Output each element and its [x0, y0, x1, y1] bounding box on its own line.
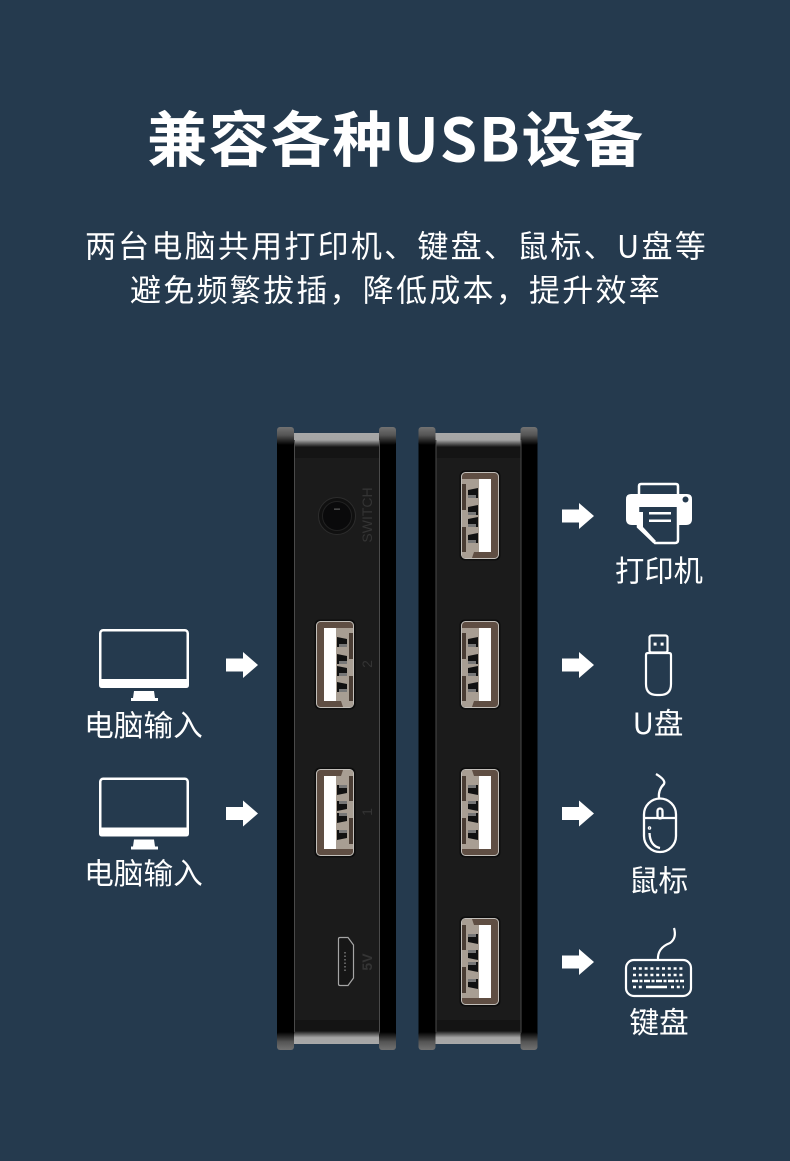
port number 1: 1 — [359, 808, 375, 816]
icon: monitor — [99, 779, 189, 850]
usb port B — [460, 620, 500, 710]
icon: monitor — [99, 630, 189, 701]
icon: usb drive — [646, 636, 671, 695]
arrow — [226, 652, 258, 678]
arrow — [562, 800, 594, 826]
input 2: computer — [84, 779, 203, 893]
label: mouse: 鼠标 — [629, 857, 688, 900]
switch button — [318, 498, 356, 534]
label: 电脑输入 — [84, 850, 203, 893]
label: keyboard: 键盘 — [629, 999, 689, 1042]
arrow — [562, 949, 594, 975]
arrow — [562, 652, 594, 678]
arrow — [226, 800, 258, 826]
subtitle text block: 避免频繁拔插，降低成本，提升效率 — [130, 266, 662, 310]
usb port D — [460, 916, 500, 1006]
switch label: SWITCH — [359, 487, 375, 543]
label: printer: 打印机 — [615, 548, 703, 590]
icon: keyboard — [626, 928, 691, 996]
usb port A — [460, 470, 500, 560]
icon: printer — [626, 484, 692, 543]
label: usb drive: U盘 — [633, 701, 683, 743]
usb port C — [460, 768, 500, 858]
usb port 1 — [314, 768, 356, 858]
usb port 2 — [314, 620, 356, 710]
micro usb power port — [338, 938, 354, 986]
input 1: computer — [84, 630, 203, 745]
port number 2: 2 — [359, 660, 375, 668]
subtitle text block: 两台电脑共用打印机、键盘、鼠标、U盘等 — [85, 222, 708, 266]
icon: mouse — [644, 774, 676, 852]
panel: left device with inputs — [277, 427, 396, 1050]
arrow — [562, 503, 594, 529]
5V label: 5V — [359, 953, 375, 971]
label: 电脑输入 — [84, 702, 203, 745]
title: 兼容各种USB设备 — [147, 92, 645, 180]
panel: right device with outputs — [418, 427, 538, 1050]
subtitle text block — [85, 222, 708, 310]
